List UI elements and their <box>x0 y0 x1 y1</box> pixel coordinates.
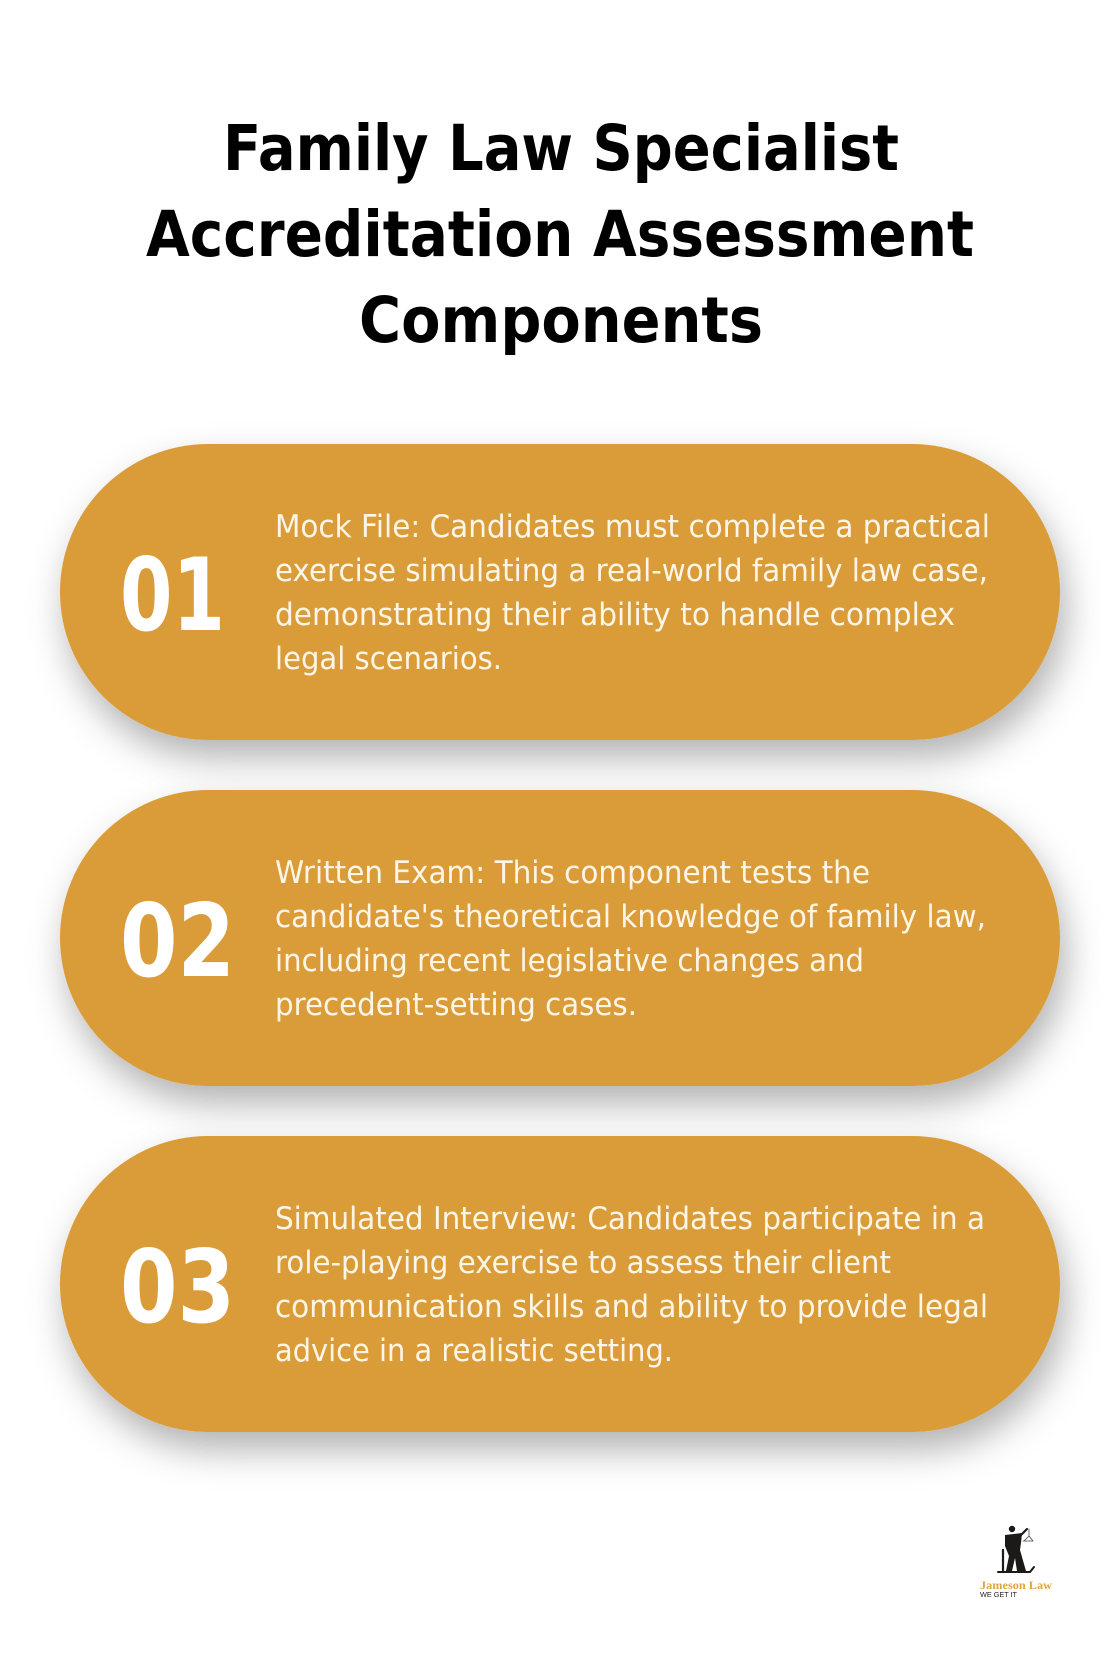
number 01: 01 <box>120 536 225 654</box>
icon: lady justice with L <box>998 1526 1034 1572</box>
text: mock file description: legal scenarios. <box>275 641 502 677</box>
logo name: Jameson Law <box>980 1578 1052 1592</box>
number 03: 03 <box>120 1228 235 1346</box>
number 02: 02 <box>120 882 235 1000</box>
text: simulated interview description: Simulated Interview: Candidates participate in a <box>275 1201 985 1237</box>
text: simulated interview description: role-playing exercise to assess their client <box>275 1245 891 1281</box>
logo tagline: WE GET IT <box>980 1590 1017 1599</box>
title: Accreditation Assessment <box>146 198 974 271</box>
text: mock file description: exercise simulating a real-world family law case, <box>275 553 988 589</box>
text: mock file description: Mock File: Candidates must complete a practical <box>275 509 990 545</box>
text: simulated interview description: communication skills and ability to provide legal <box>275 1289 988 1325</box>
panel: step 01 mock file <box>60 444 1060 740</box>
text: written exam description <box>275 855 986 1023</box>
text: mock file description <box>275 509 990 677</box>
text: simulated interview description: advice in a realistic setting. <box>275 1333 673 1369</box>
text: simulated interview description <box>275 1201 988 1369</box>
title: Family Law Specialist <box>223 112 899 185</box>
text: written exam description: including recent legislative changes and <box>275 943 864 979</box>
text: written exam description: candidate's theoretical knowledge of family law, <box>275 899 986 935</box>
title <box>146 112 974 357</box>
panel: step 03 simulated interview <box>60 1136 1060 1432</box>
logo: Jameson Law <box>980 1526 1052 1599</box>
title: Components <box>359 284 763 357</box>
text: mock file description: demonstrating their ability to handle complex <box>275 597 955 633</box>
panel: step 02 written exam <box>60 790 1060 1086</box>
text: written exam description: Written Exam: This component tests the <box>275 855 870 891</box>
text: written exam description: precedent-setting cases. <box>275 987 637 1023</box>
